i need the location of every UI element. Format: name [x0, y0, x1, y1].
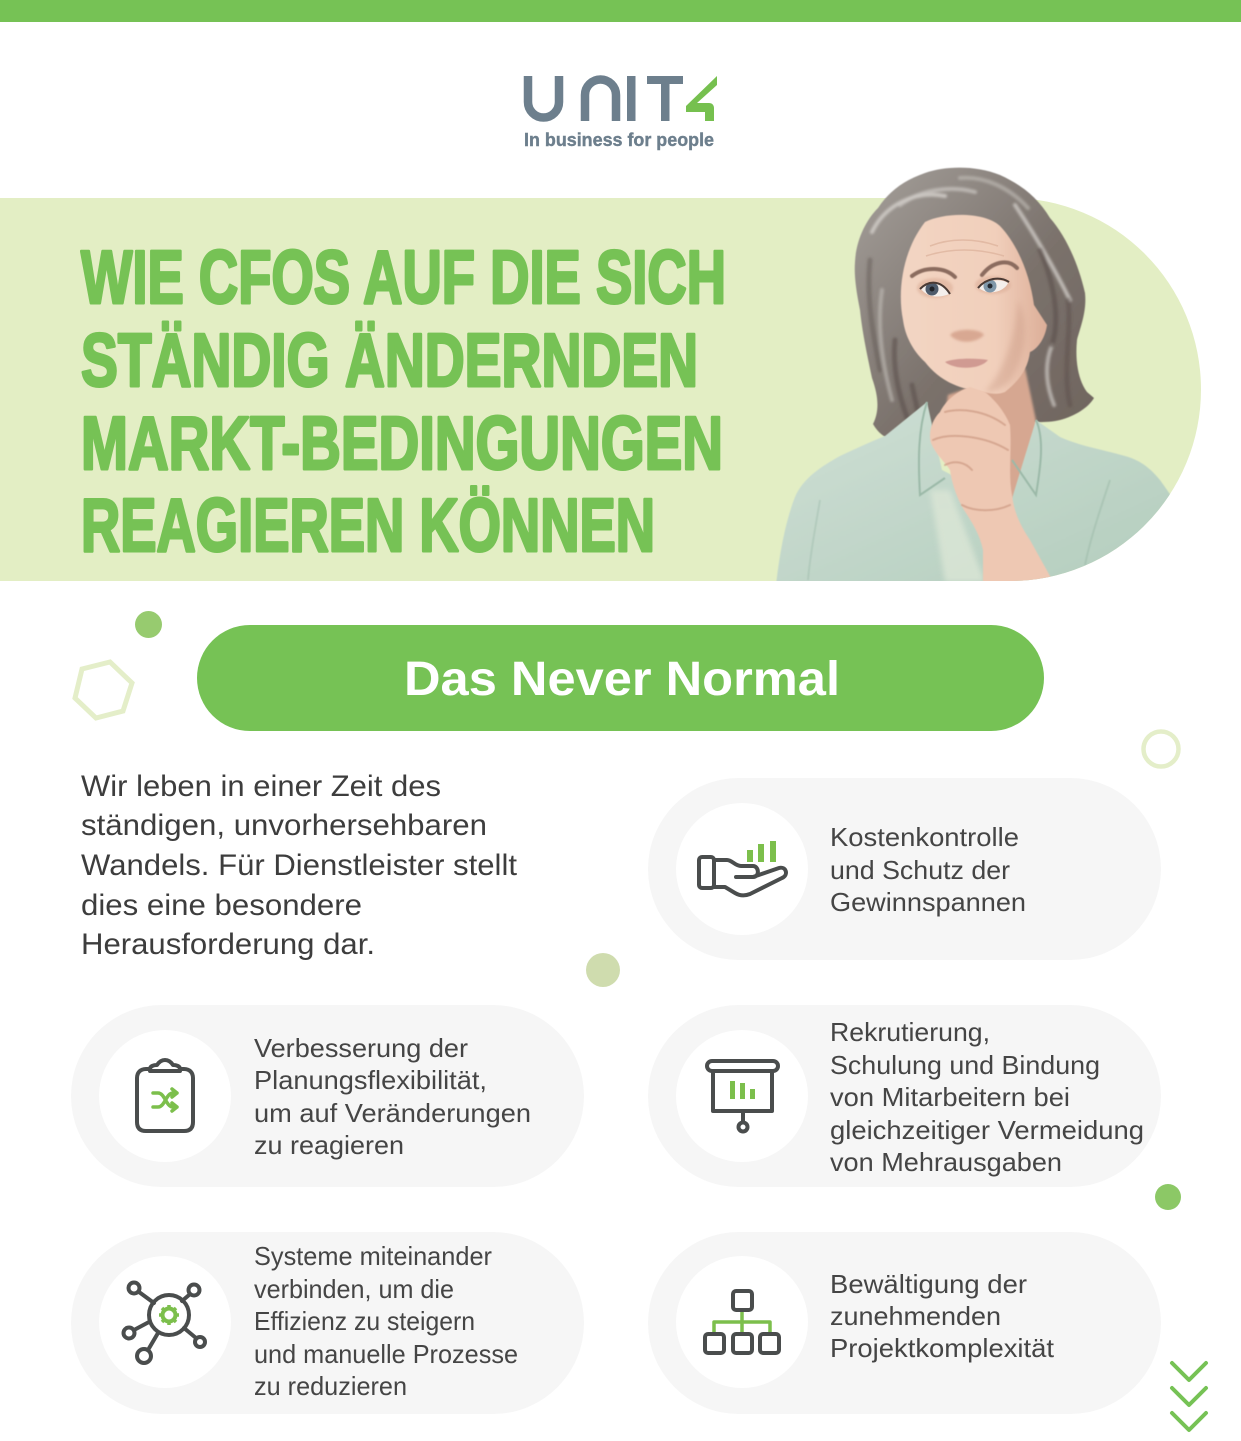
panel text: zunehmenden: [830, 1301, 1001, 1331]
icon: network with gear: [124, 1282, 205, 1363]
panel text: Systeme miteinander: [254, 1241, 492, 1271]
title: WIE CFOS AUF DIE SICH: [81, 235, 726, 319]
finger lines: [933, 410, 1010, 510]
decoration: pale circle: [586, 953, 620, 987]
hair strands: [869, 178, 1070, 425]
panel text: von Mitarbeitern bei: [830, 1082, 1070, 1112]
eyebrows: [912, 262, 1017, 277]
panel text: gleichzeitiger Vermeidung: [830, 1115, 1144, 1145]
panel text: [830, 1269, 1055, 1363]
intro text: Wir leben in einer Zeit des: [81, 770, 441, 803]
icon: scroll-down chevrons: [1172, 1363, 1206, 1430]
back hair: [855, 168, 1094, 440]
neck: [940, 368, 1037, 500]
panel text: [830, 1017, 1144, 1177]
decoration: ring: [1144, 732, 1178, 766]
panel text: um auf Veränderungen: [254, 1098, 531, 1128]
panel text: [254, 1033, 531, 1160]
icon: clipboard with shuffle: [137, 1060, 193, 1131]
shirt folds and collar: [808, 402, 1110, 580]
face shading: [988, 309, 1024, 392]
title: REAGIEREN KÖNNEN: [81, 483, 655, 567]
panel text: Planungsflexibilität,: [254, 1065, 487, 1095]
intro text: [81, 770, 518, 961]
panel text: [254, 1241, 518, 1401]
panel text: Gewinnspannen: [830, 887, 1026, 917]
hero banner background: [0, 198, 1201, 581]
heading text: Das Never Normal: [404, 653, 840, 706]
panel: connecting systems: [71, 1232, 584, 1414]
decoration: green circle: [1155, 1184, 1181, 1210]
logo wordmark: [528, 76, 717, 121]
panel text: Verbesserung der: [254, 1033, 468, 1063]
panel text: [830, 822, 1026, 917]
nose: [950, 330, 984, 342]
panel text: und Schutz der: [830, 855, 1010, 885]
icon: org chart: [705, 1291, 779, 1353]
decoration: hexagon: [75, 662, 132, 718]
top green bar: [0, 0, 1241, 22]
decoration: circle: [135, 611, 162, 638]
logo: Unit4: [524, 76, 717, 150]
panel text: Kostenkontrolle: [830, 822, 1019, 852]
panel text: Rekrutierung,: [830, 1017, 990, 1047]
eye sockets: [917, 276, 1011, 298]
photo: thoughtful woman: [776, 168, 1172, 585]
panel text: verbinden, um die: [254, 1274, 454, 1304]
panel text: Projektkomplexität: [830, 1333, 1055, 1363]
panel: project complexity: [648, 1232, 1161, 1414]
heading pill: [197, 625, 1044, 731]
intro text: ständigen, unvorhersehbaren: [81, 809, 487, 842]
intro text: Herausforderung dar.: [81, 928, 375, 961]
icon: hand with bars: [699, 841, 786, 895]
lips: [945, 359, 988, 368]
shirt placket: [930, 490, 985, 582]
title: [81, 235, 726, 567]
title: MARKT-BEDINGUNGEN: [81, 401, 723, 485]
intro text: dies eine besondere: [81, 889, 362, 922]
forehead wrinkles: [926, 240, 1004, 256]
panel text: von Mehrausgaben: [830, 1147, 1062, 1177]
panel text: und manuelle Prozesse: [254, 1339, 518, 1369]
icon: presentation board: [707, 1061, 778, 1132]
panel: planning flexibility: [71, 1005, 584, 1187]
panel text: Schulung und Bindung: [830, 1050, 1100, 1080]
panel: recruiting: [648, 1005, 1161, 1187]
panel text: zu reagieren: [254, 1130, 404, 1160]
hand: [930, 387, 1055, 585]
panel text: zu reduzieren: [254, 1371, 407, 1401]
intro text: Wandels. Für Dienstleister stellt: [81, 849, 518, 882]
panel text: Effizienz zu steigern: [254, 1306, 475, 1336]
logo tagline: In business for people: [524, 130, 714, 150]
shirt: [776, 402, 1172, 585]
eyes: [920, 279, 1009, 297]
title: STÄNDIG ÄNDERNDEN: [81, 318, 698, 402]
panel text: Bewältigung der: [830, 1269, 1027, 1299]
panel: cost control: [648, 778, 1161, 960]
face: [901, 215, 1047, 394]
